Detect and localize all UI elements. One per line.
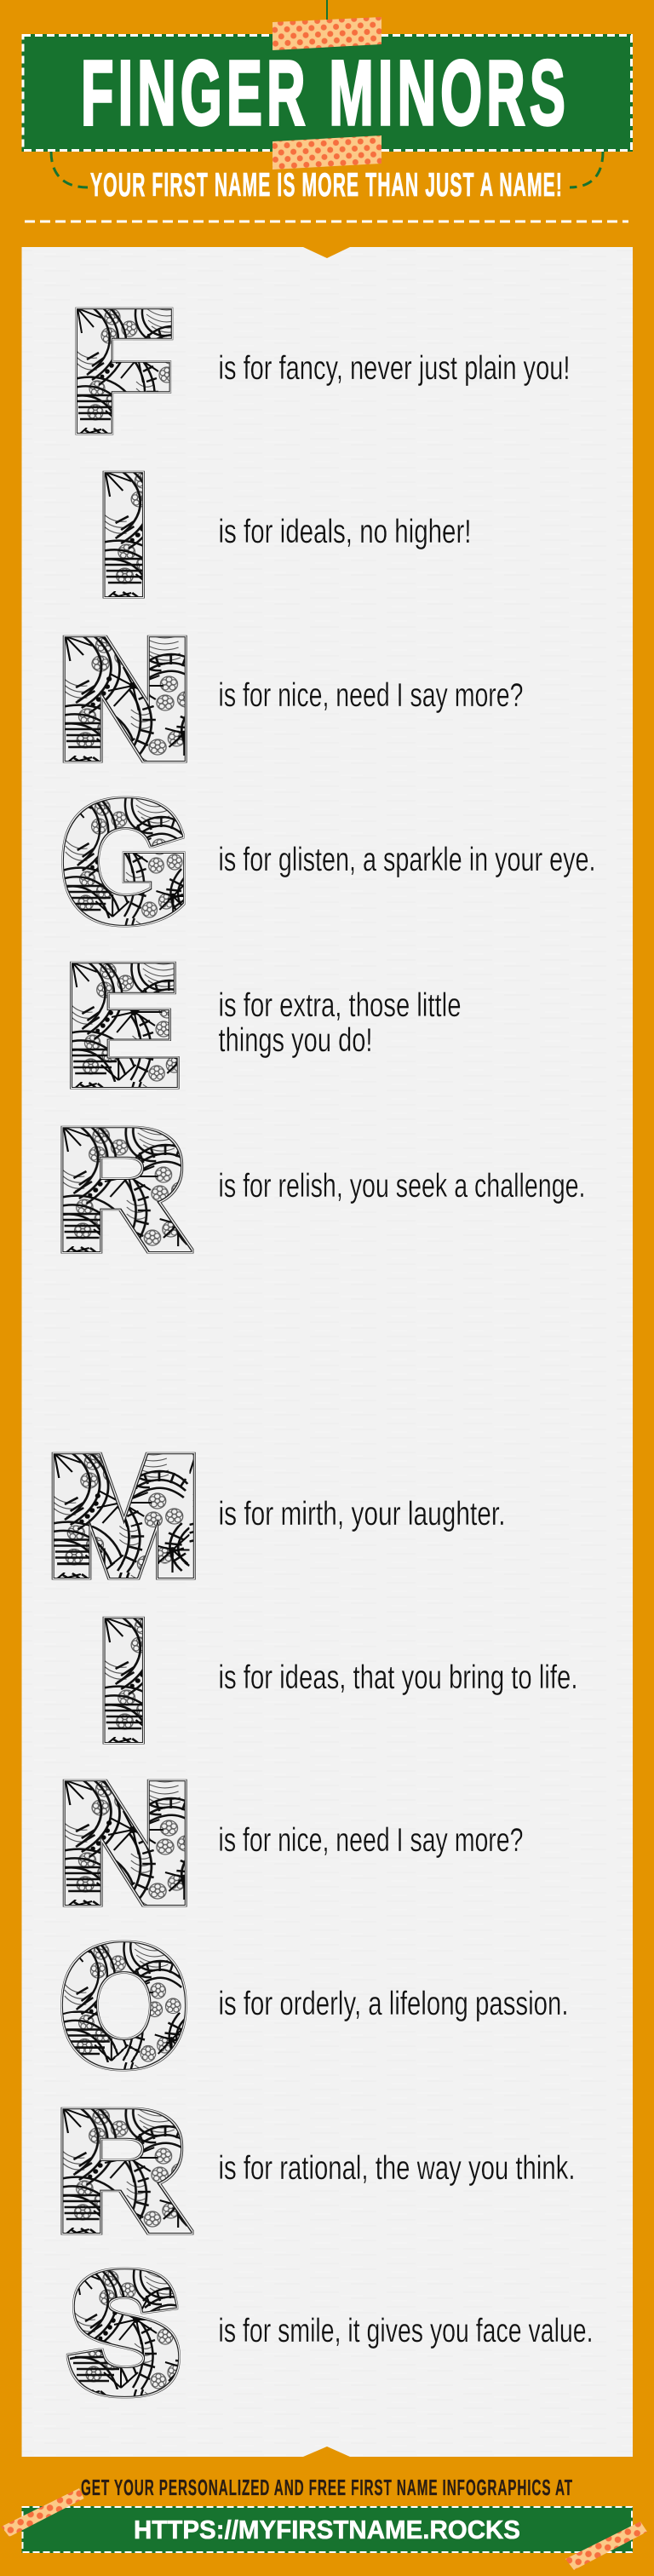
- left tape: [2, 2488, 83, 2537]
- right dashed connector: [570, 152, 603, 187]
- green title panel: [22, 34, 633, 152]
- letter N row 2: [59, 1751, 523, 1935]
- letter M: M: [48, 1424, 199, 1608]
- letter R: R: [57, 2079, 185, 2263]
- description I: is for ideals, no higher!: [218, 514, 472, 550]
- left dashed connector: [51, 152, 88, 187]
- url: HTTPS://MYFIRSTNAME.ROCKS: [134, 2515, 520, 2544]
- letter S row: [70, 2240, 593, 2424]
- green url panel: [22, 2506, 633, 2553]
- right tape: [565, 2521, 647, 2570]
- letter F: F: [72, 279, 172, 463]
- letter R: R: [57, 1097, 185, 1281]
- description E: is for extra, those little: [218, 987, 462, 1024]
- description N: is for nice, need I say more?: [218, 1822, 523, 1859]
- letter M row: [48, 1424, 506, 1608]
- letter N: N: [59, 607, 192, 791]
- letter R row 2: [57, 2079, 576, 2263]
- description M: is for mirth, your laughter.: [218, 1496, 506, 1532]
- description E: things you do!: [218, 1022, 373, 1059]
- bottom tape: [272, 135, 382, 170]
- letter I: I: [99, 442, 148, 626]
- letter E row: [66, 934, 462, 1118]
- hanging string: [326, 0, 328, 20]
- letter N row: [59, 607, 523, 791]
- letter I row: [99, 442, 472, 626]
- footer: [2, 2475, 647, 2570]
- header banner: [22, 0, 633, 204]
- letter N: N: [59, 1751, 192, 1935]
- letter S: S: [70, 2240, 180, 2424]
- letter E: E: [66, 934, 178, 1118]
- letter G: G: [62, 770, 188, 953]
- letter I row 2: [99, 1588, 577, 1772]
- letter O row: [61, 1914, 569, 2097]
- description E: [218, 987, 462, 1059]
- top tape: [272, 17, 382, 50]
- letter O: O: [61, 1914, 186, 2097]
- description N: is for nice, need I say more?: [218, 677, 523, 714]
- letter G row: [62, 770, 596, 953]
- letter R row: [57, 1097, 586, 1281]
- dashed divider: [25, 220, 628, 223]
- letter I: I: [99, 1588, 148, 1772]
- letter F row: [72, 279, 571, 463]
